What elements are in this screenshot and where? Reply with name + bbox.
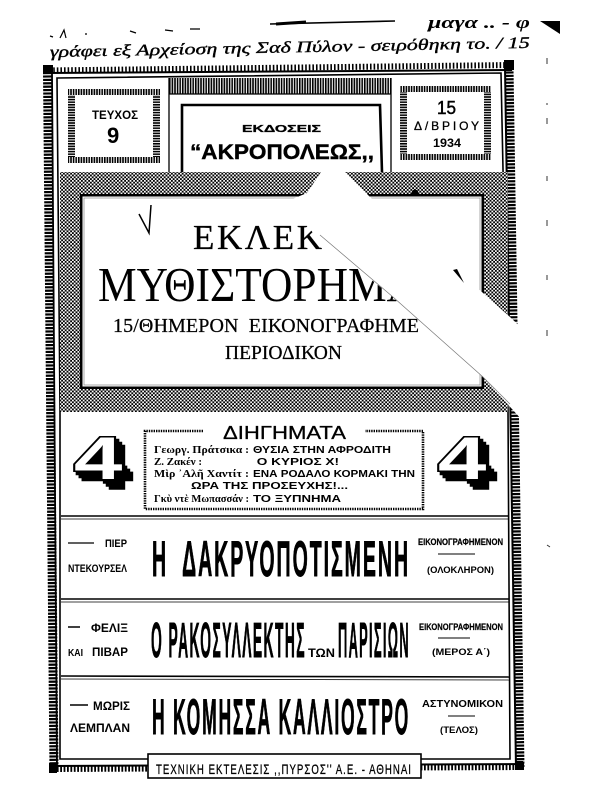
numeral 4 left: 4: [83, 433, 132, 501]
title panel: [80, 190, 484, 389]
stories heading: ΔΙΗΓΗΜΑΤΑ: [223, 423, 346, 443]
stories list: ΩΡΑ ΤΗΣ ΠΡΟΣΕΥΧΗΣ!...: [191, 481, 348, 492]
row: Ο Ρακοσυλλέκτης των Παρισίων: ΚΑΙ: [68, 648, 83, 659]
short stories section: [145, 423, 423, 509]
triangle fragment: [453, 269, 464, 283]
handwritten note: [50, 13, 530, 61]
numeral 4 left: 4: [77, 427, 126, 495]
row: Η Κόμησσα Καλλιόστρο: ΛΕΜΠΛΑΝ: [70, 721, 130, 735]
date box: 15: [437, 98, 456, 118]
printer credit box: [148, 754, 421, 778]
numeral 4 left: 4: [74, 424, 123, 492]
stories list: ΤΟ ΞΥΠΝΗΜΑ: [253, 494, 341, 505]
border corner squares: [43, 60, 523, 773]
issue box: ΤΕΥΧΟΣ: [92, 108, 138, 122]
date box: 1934: [433, 136, 461, 150]
stories list: Μὶρ ᾿Αλῆ Χαντίτ :: [154, 469, 249, 480]
tear edge: [320, 235, 510, 404]
title text: [98, 218, 419, 364]
numeral 4 right: 4: [438, 424, 487, 492]
row: Η Κόμησσα Καλλιόστρο: ΑΣΤΥΝΟΜΙΚΟΝ: [422, 699, 503, 710]
numeral 4 left: 4: [80, 430, 129, 498]
row: Η Κόμησσα Καλλιόστρο: (ΤΕΛΟΣ): [440, 725, 478, 735]
inner frame: [57, 73, 510, 759]
row: Ο Ρακοσυλλέκτης των Παρισίων: (ΜΕΡΟΣ Α΄): [432, 647, 490, 657]
handwritten note: μαγα .. - φ: [427, 13, 530, 32]
issue box: [68, 89, 160, 163]
numeral 4 right: 4: [441, 427, 490, 495]
handwritten note: γράφει εξ Αρχείοση της Σαδ Πύλον - σειρόθηκη το. / 15: [50, 35, 530, 61]
margin specks: [546, 58, 550, 547]
title text: ΜΥΘΙΣΤΟΡΗΜΑ: [98, 257, 419, 312]
title text: ΕΚΛΕΚ: [193, 218, 322, 257]
checkered title band: [60, 172, 508, 412]
stories list: ΕΝΑ ΡΟΔΑΛΟ ΚΟΡΜΑΚΙ ΤΗΝ: [253, 469, 415, 480]
title text: ΠΕΡΙΟΔΙΚΟΝ: [225, 342, 342, 364]
stories list: Γκὺ ντὲ Μωπασσάν :: [154, 494, 249, 505]
title text: 15/ΘΗΜΕΡΟΝ ΕΙΚΟΝΟΓΡΑΦΗΜΕ: [113, 315, 419, 337]
torn page area: [290, 169, 565, 425]
row: Η Κόμησσα Καλλιόστρο: [70, 689, 503, 745]
issue box: 9: [107, 123, 119, 148]
row: Η Δακρυοποτισμένη: ΠΙΕΡ: [105, 538, 127, 550]
serrated outer border: [46, 65, 524, 770]
row: Η Δακρυοποτισμένη: [68, 531, 503, 587]
numeral 4 right: 4: [447, 433, 496, 501]
row: Η Δακρυοποτισμένη: (ΟΛΟΚΛΗΡΟΝ): [427, 565, 494, 575]
stories list: Γεωργ. Πράτσικα :: [154, 445, 249, 456]
stories list: Ο ΚΥΡΙΟΣ Χ!: [253, 457, 339, 468]
date box: [400, 86, 491, 160]
numeral 4 right: 4: [444, 430, 493, 498]
row: Ο Ρακοσυλλέκτης των Παρισίων: ΤΩΝ: [308, 646, 335, 660]
header dividers: [169, 78, 391, 172]
printer credit box: ΤΕΧΝΙΚΗ ΕΚΤΕΛΕΣΙΣ ,,ΠΥΡΣΟΣ'' Α.Ε. - ΑΘΗΝΑΙ: [156, 761, 412, 777]
row: Η Δακρυοποτισμένη: ΝΤΕΚΟΥΡΣΕΛ: [68, 563, 128, 575]
publisher box: ΕΚΔΟΣΕΙΣ: [242, 124, 321, 135]
corner mark: [540, 21, 560, 34]
striped top bar: [169, 78, 391, 94]
publisher box: [182, 105, 382, 172]
publisher box: “ΑΚΡΟΠΟΛΕΩΣ,,: [190, 141, 374, 164]
row dividers: [61, 516, 510, 680]
row: Ο Ρακοσυλλέκτης των Παρισίων: ΠΙΒΑΡ: [92, 645, 128, 659]
row: Η Κόμησσα Καλλιόστρο: ΜΩΡΙΣ: [93, 699, 130, 713]
row: Ο Ρακοσυλλέκτης των Παρισίων: [68, 614, 503, 668]
stories list: Ζ. Ζακέν :: [154, 457, 202, 468]
stories dotted box: [145, 431, 423, 509]
stories list: ΘΥΣΙΑ ΣΤΗΝ ΑΦΡΟΔΙΤΗ: [253, 445, 391, 456]
stories list: [154, 445, 415, 505]
date box: Δ/ΒΡΙΟΥ: [414, 119, 479, 133]
row: Η Δακρυοποτισμένη: ΕΙΚΟΝΟΓΡΑΦΗΜΕΝΟΝ: [418, 537, 503, 547]
row: Ο Ρακοσυλλέκτης των Παρισίων: ΦΕΛΙΞ: [91, 621, 128, 635]
row: Ο Ρακοσυλλέκτης των Παρισίων: ΕΙΚΟΝΟΓΡΑΦΗΜΕΝΟΝ: [419, 622, 503, 632]
